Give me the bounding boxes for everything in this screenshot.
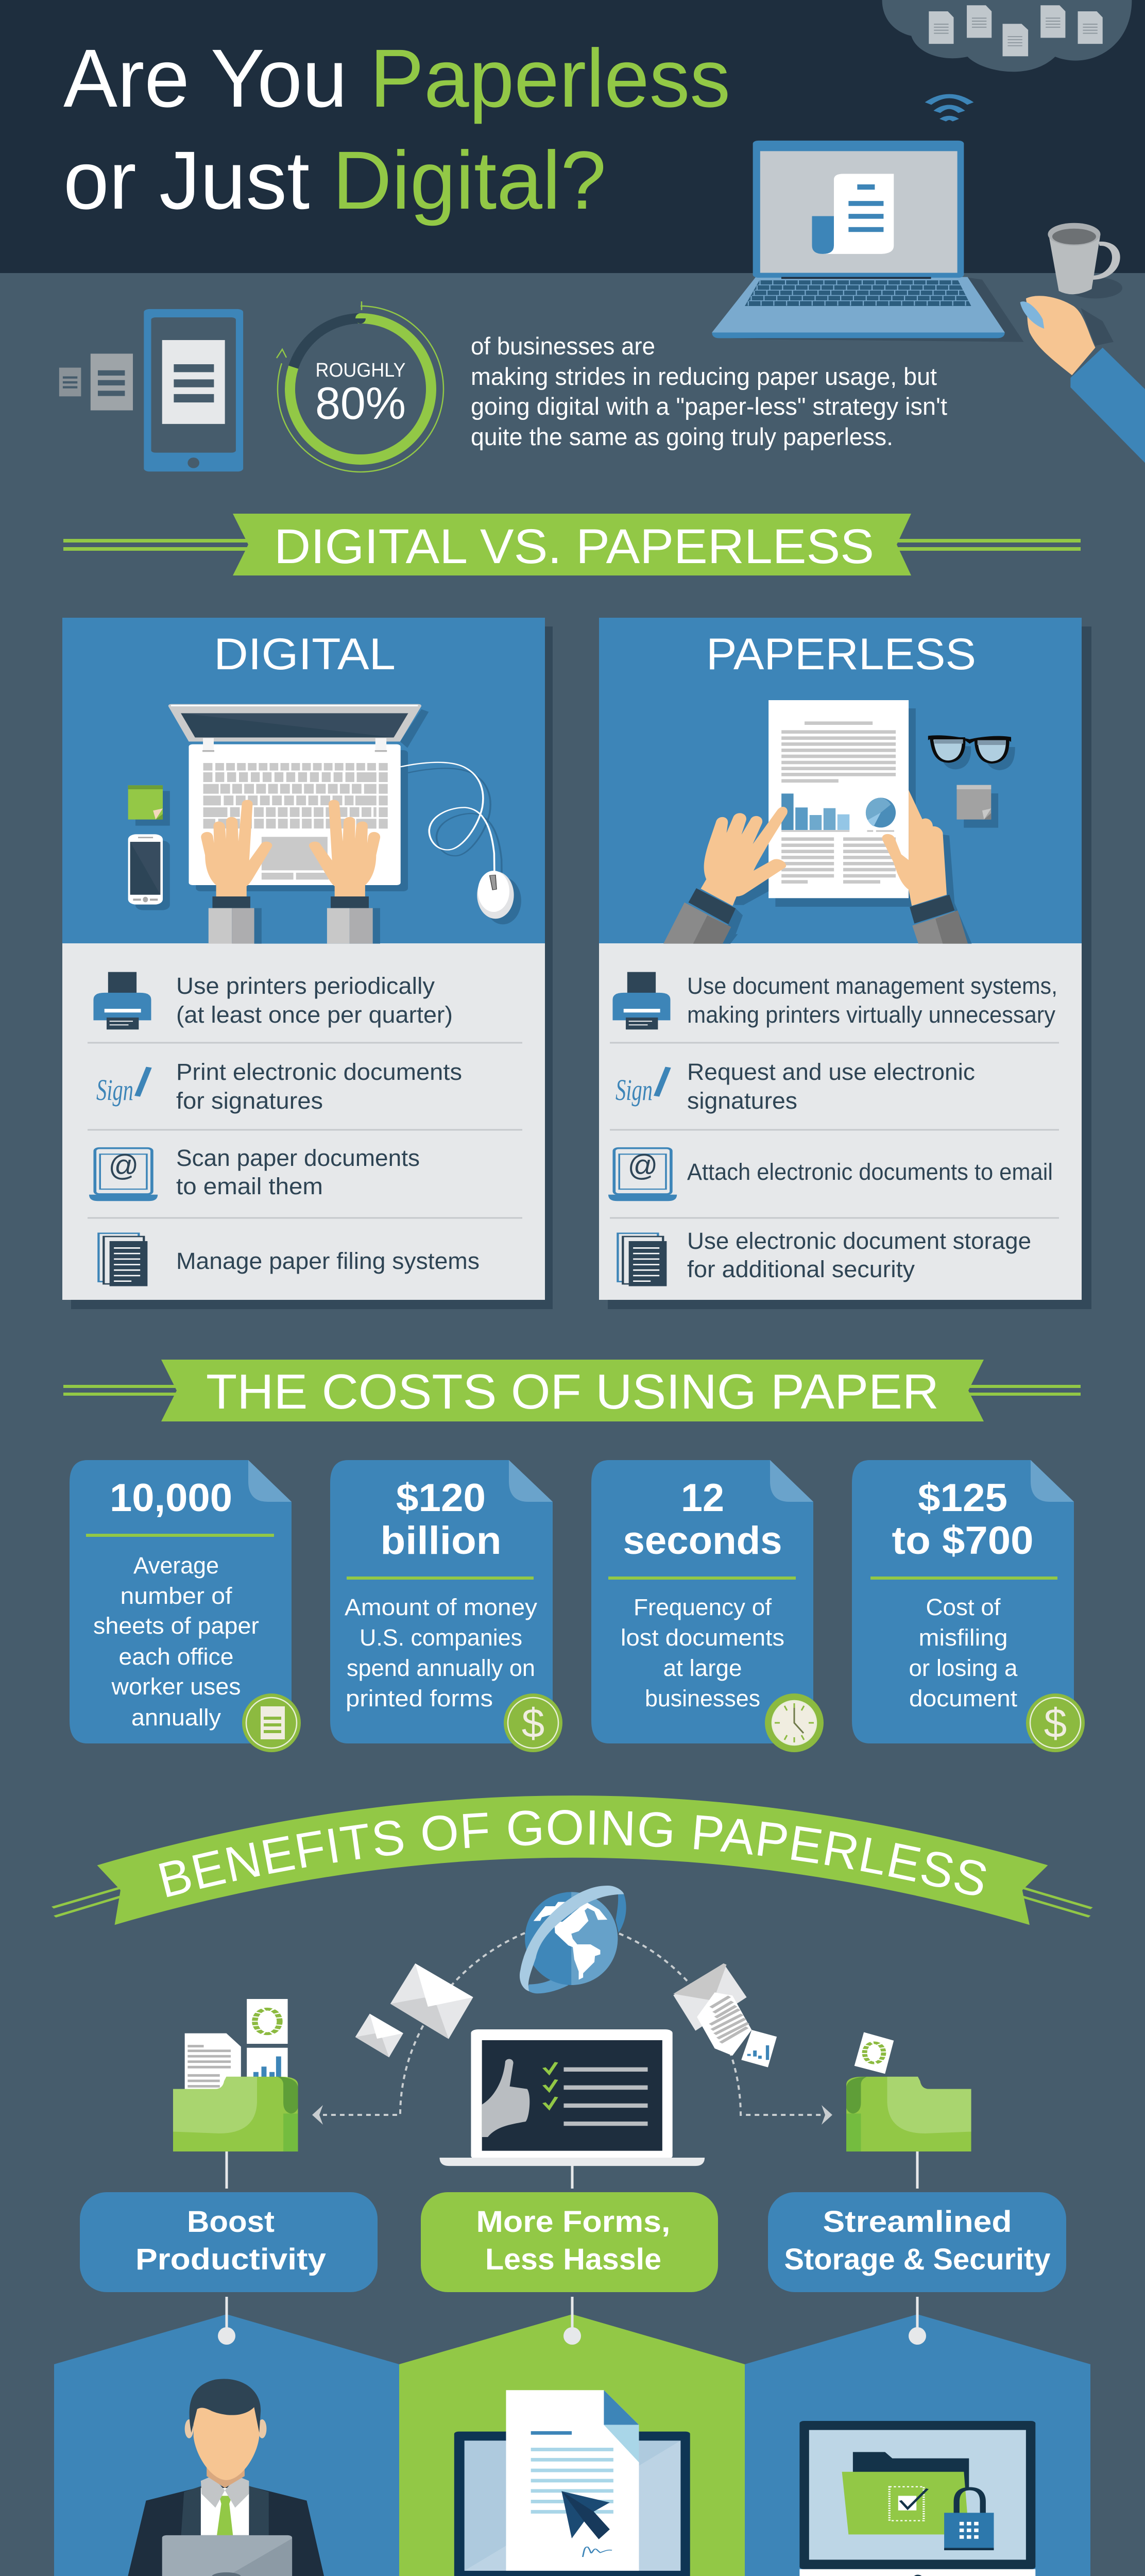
- title: Are You Paperless: [63, 32, 730, 124]
- stat card: 10,000 sheets: [70, 1460, 301, 1752]
- icon: globe: [520, 1886, 626, 1993]
- heading: benefits of going paperless: [52, 1795, 1093, 1925]
- stat card: $125 to $700: to $700: [892, 1519, 1033, 1563]
- stat card: 10,000 sheets: Average: [133, 1552, 219, 1579]
- panel: digital: [62, 618, 553, 1309]
- stat card: 12 seconds: lost documents: [621, 1624, 784, 1651]
- heading: the costs of using paper: [63, 1360, 1081, 1421]
- connector lines to pills: [227, 2151, 917, 2189]
- intro paragraph: going digital with a "paper-less" strategy isn't: [471, 393, 947, 420]
- icon: dollar badge: $: [1044, 1700, 1067, 1746]
- list: paperless items: Use electronic document storage: [687, 1228, 1031, 1254]
- list: paperless items: for additional security: [687, 1256, 915, 1282]
- icon: dollar badge: $: [522, 1700, 544, 1746]
- icons: printer, signature, email tablet, filing stack: Sign: [616, 1073, 653, 1107]
- icon: wifi signal: [928, 96, 970, 120]
- stat card: 10,000 sheets: number of: [121, 1583, 232, 1609]
- illustration: laptop on desk: [712, 141, 1024, 342]
- heading: the costs of using paper: THE COSTS OF USING PAPER: [206, 1364, 939, 1419]
- illustration: monitor with locked folder: [764, 2421, 1070, 2576]
- illustration: monitor with signed document: [418, 2390, 725, 2576]
- column: streamlined storage and security: [745, 2297, 1090, 2576]
- intro paragraph: quite the same as going truly paperless.: [471, 423, 893, 450]
- icons: printer, signature, email tablet, filing stack: [89, 972, 158, 1286]
- stat card: 12 seconds: Frequency of: [634, 1594, 772, 1620]
- intro paragraph: of businesses are: [471, 332, 655, 360]
- icon: right folder with paper: [846, 2032, 971, 2151]
- list: paperless items: Attach electronic documents to email: [687, 1159, 1053, 1185]
- list: digital items: to email them: [176, 1173, 323, 1199]
- stat card: 10,000 sheets: worker uses: [111, 1673, 241, 1700]
- pill: more forms, less hassle: More Forms,: [476, 2205, 671, 2239]
- panel: paperless: [599, 618, 1091, 1309]
- illustration: laptop with hands, phone and mouse: [128, 704, 521, 944]
- stat card: 10,000 sheets: 10,000: [110, 1476, 232, 1520]
- list: paperless items: [687, 973, 1057, 1282]
- list: digital items: Print electronic documents: [176, 1059, 462, 1085]
- list: digital items: [176, 973, 480, 1274]
- stat card: 12 seconds: [591, 1460, 824, 1752]
- illustration: hands holding a report, glasses and note: [663, 700, 1015, 944]
- list: paperless items: making printers virtually unnecessary: [687, 1002, 1055, 1028]
- icon: envelopes with document: [355, 1963, 777, 2067]
- list: digital items: Use printers periodically: [176, 973, 435, 999]
- icon: cloud with documents: [882, 0, 1132, 72]
- pill: more forms, less hassle: [421, 2192, 718, 2292]
- title: [63, 32, 730, 226]
- icon: dollar badge: [1026, 1693, 1085, 1752]
- illustration: coffee mug: [1048, 223, 1122, 298]
- pill: streamlined storage and security: Storage & Security: [784, 2243, 1051, 2276]
- stat card: 12 seconds: seconds: [623, 1519, 782, 1563]
- list: digital items: Scan paper documents: [176, 1145, 420, 1171]
- column: more forms, less hassle: [399, 2297, 745, 2576]
- chart: roughly 80% donut: ROUGHLY: [315, 360, 406, 381]
- stat card: 10,000 sheets: each office: [118, 1643, 234, 1670]
- column: boost productivity: [54, 2297, 399, 2576]
- stat card: $125 to $700: [852, 1460, 1085, 1752]
- icons: printer, signature, email tablet, filing stack: Sign: [96, 1073, 133, 1107]
- intro paragraph: [471, 332, 947, 450]
- panel heading: paperless: PAPERLESS: [706, 630, 976, 679]
- panel heading: digital: DIGITAL: [214, 630, 396, 679]
- heading: digital vs paperless: [63, 514, 1081, 575]
- list: digital items: Manage paper filing systems: [176, 1248, 480, 1274]
- list: paperless items: Use document management systems,: [687, 973, 1057, 999]
- icon: document badge: [242, 1693, 301, 1752]
- stat card: $120 billion: [330, 1460, 562, 1752]
- stat card: $120 billion: billion: [380, 1519, 502, 1563]
- stat card: $125 to $700: document: [909, 1685, 1018, 1711]
- pill: more forms, less hassle: Less Hassle: [485, 2243, 661, 2276]
- stat card: 10,000 sheets: annually: [131, 1704, 221, 1731]
- icon: tablet with documents: [59, 309, 243, 471]
- stat card: $125 to $700: $125: [918, 1476, 1007, 1520]
- pill: boost productivity: [80, 2192, 378, 2292]
- illustration: businessman with laptop: [74, 2379, 381, 2576]
- pill: streamlined storage and security: [768, 2192, 1066, 2292]
- stat card: 12 seconds: 12: [681, 1476, 724, 1520]
- stat card: 12 seconds: at large: [663, 1655, 742, 1681]
- stat card: 12 seconds: businesses: [645, 1685, 760, 1711]
- list: digital items: (at least once per quarter): [176, 1002, 453, 1028]
- stat card: $120 billion: $120: [396, 1476, 486, 1520]
- stat card: $120 billion: printed forms: [346, 1685, 493, 1711]
- stat card: 10,000 sheets: sheets of paper: [93, 1613, 259, 1639]
- heading: benefits of going paperless: BENEFITS OF GOING PAPERLESS: [159, 1810, 986, 1897]
- stat card: $125 to $700: Cost of: [926, 1594, 1001, 1620]
- stat card: $125 to $700: misfiling: [919, 1624, 1007, 1651]
- stat card: $125 to $700: or losing a: [909, 1655, 1018, 1681]
- icon: laptop with checklist: [439, 2029, 705, 2166]
- title: or Just Digital?: [63, 134, 606, 226]
- pill: boost productivity: Productivity: [135, 2243, 326, 2276]
- dotted arrows: globe to folders: [312, 1933, 832, 2125]
- pill: streamlined storage and security: Streamlined: [823, 2205, 1012, 2239]
- illustration: hand on mouse: [1020, 296, 1145, 463]
- stat card: $120 billion: Amount of money: [345, 1594, 538, 1620]
- list: paperless items: Request and use electronic: [687, 1059, 975, 1085]
- heading: digital vs paperless: DIGITAL VS. PAPERLESS: [274, 519, 874, 574]
- chart: roughly 80% donut: 80%: [315, 378, 406, 429]
- icon: dollar badge: [504, 1693, 562, 1752]
- list: paperless items: signatures: [687, 1088, 797, 1114]
- icon: left folder with documents: [173, 1999, 298, 2151]
- icons: printer, signature, email tablet, filing stack: @: [109, 1149, 139, 1182]
- icons: printer, signature, email tablet, filing stack: [608, 972, 677, 1286]
- stat card: $120 billion: spend annually on: [347, 1655, 535, 1681]
- list: digital items: for signatures: [176, 1088, 323, 1114]
- pill: boost productivity: Boost: [187, 2205, 275, 2239]
- icon: clock badge: [765, 1693, 824, 1752]
- stat card: $120 billion: U.S. companies: [360, 1624, 522, 1651]
- icons: printer, signature, email tablet, filing stack: @: [628, 1149, 658, 1182]
- intro paragraph: making strides in reducing paper usage, but: [471, 363, 937, 390]
- chart: roughly 80% donut: [277, 301, 443, 472]
